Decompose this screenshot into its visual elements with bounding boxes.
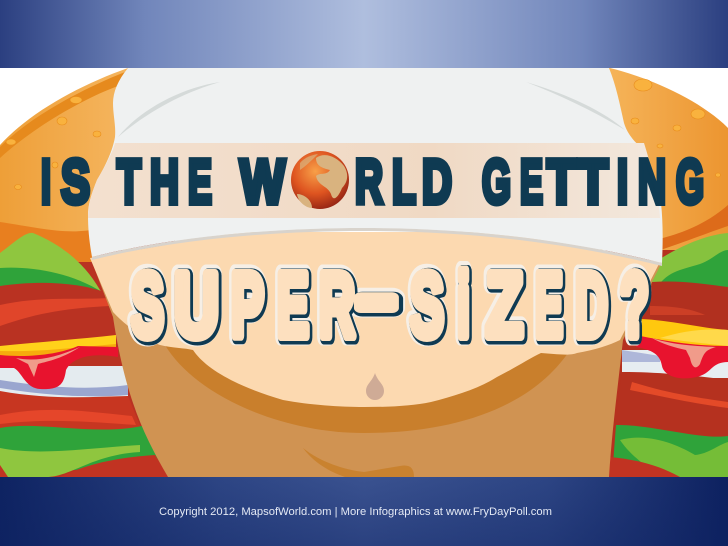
letter halo: R	[319, 256, 355, 356]
letter shadow: S	[132, 258, 166, 358]
lower belly fold	[303, 448, 414, 477]
icon: globe	[291, 151, 349, 209]
letter shadow: E	[278, 258, 310, 358]
letter halo: D	[575, 256, 608, 356]
belly button	[366, 373, 384, 400]
heading: is the world getting: I	[41, 148, 51, 217]
letter fill: S	[131, 256, 164, 356]
letter halo: E	[535, 256, 563, 356]
heading: super-sized	[131, 246, 650, 358]
letter halo	[131, 246, 649, 356]
letter shadow: U	[176, 258, 220, 358]
letter shadow: D	[576, 258, 610, 358]
belly light skin	[90, 232, 660, 407]
letter shadow: E	[536, 258, 564, 358]
belly crease band	[165, 345, 570, 433]
heading: is the world getting: T	[117, 148, 141, 217]
letter shadow: -	[358, 248, 398, 348]
letter halo: Z	[486, 256, 523, 356]
letter fill: E	[277, 256, 309, 356]
heading: is the world getting: W	[240, 148, 285, 217]
belly dark skin	[92, 262, 662, 477]
letter fill	[131, 246, 649, 356]
letter fill: U	[174, 256, 219, 356]
burger right side	[600, 68, 728, 477]
heading: is the world getting: G	[676, 148, 704, 217]
heading: is the world getting: E	[188, 148, 212, 217]
letter fill: ?	[620, 256, 649, 356]
letter shadow: S	[412, 258, 446, 358]
letter halo: -	[356, 246, 397, 346]
letter halo: P	[231, 256, 264, 356]
letter halo: S	[410, 256, 444, 356]
heading: is the world getting: R	[355, 148, 383, 217]
top banner	[0, 0, 728, 68]
heading: is the world getting: H	[150, 148, 179, 217]
letter fill: i	[457, 256, 470, 356]
letter fill: R	[319, 256, 355, 356]
photo background	[0, 68, 728, 477]
letter fill: D	[575, 256, 608, 356]
letter halo: U	[174, 256, 219, 356]
letter fill: Z	[486, 256, 523, 356]
letter shadow	[132, 248, 650, 358]
letter halo: E	[277, 256, 309, 356]
letter fill: E	[535, 256, 563, 356]
letter halo: i	[457, 256, 470, 356]
heading: is the world getting: G	[482, 148, 511, 217]
letter shadow: R	[320, 258, 356, 358]
letter halo: ?	[620, 256, 649, 356]
letter shadow: i	[458, 258, 472, 358]
letter shadow: ?	[622, 258, 650, 358]
heading: is the world getting: D	[422, 148, 452, 217]
burger left side	[0, 68, 175, 477]
bottom banner	[0, 477, 728, 546]
title band	[88, 143, 660, 218]
letter shadow: P	[232, 258, 266, 358]
white towel	[88, 68, 663, 263]
letter halo: S	[131, 256, 164, 356]
heading: is the world getting: I	[617, 148, 628, 217]
towel lower edge	[92, 228, 662, 266]
letter fill: S	[410, 256, 444, 356]
heading: is the world getting: N	[638, 148, 666, 217]
letter fill: P	[231, 256, 264, 356]
heading: is the world getting: T	[547, 148, 576, 217]
bun sesame seeds	[6, 79, 720, 190]
towel fold lines	[118, 82, 625, 137]
heading: is the world getting: T	[578, 148, 608, 217]
letter fill: -	[356, 246, 397, 346]
copyright text: Copyright 2012, MapsofWorld.com | More Infographics at www.FryDayPoll.com	[159, 506, 552, 518]
heading: is the world getting	[41, 148, 704, 217]
heading: is the world getting: E	[520, 148, 543, 217]
letter shadow: Z	[488, 258, 524, 358]
heading: is the world getting: L	[392, 148, 416, 217]
heading: is the world getting: S	[61, 148, 90, 217]
